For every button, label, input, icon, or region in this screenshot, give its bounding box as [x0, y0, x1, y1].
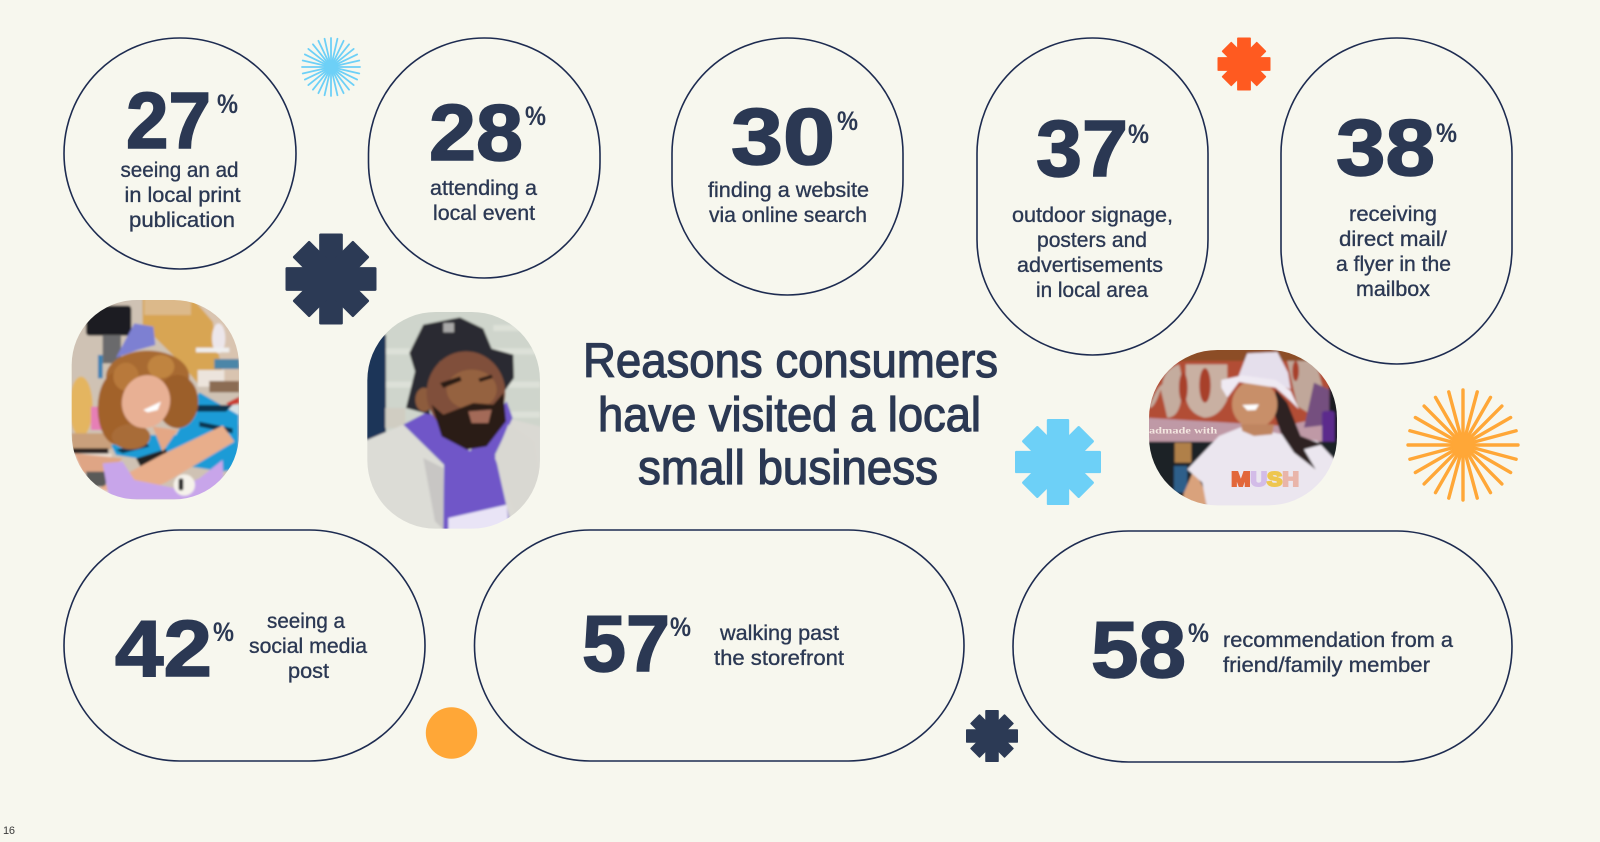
icon: small navy asterisk	[966, 710, 1018, 762]
stat bubble: 27% print ad: seeing an ad	[120, 158, 238, 182]
stat bubble: 38% direct mail: mailbox	[1356, 277, 1430, 301]
photo: man in black bucket hat and purple hoodie	[367, 312, 540, 529]
stat bubble: 38% direct mail: direct mail/	[1339, 227, 1447, 251]
stat bubble: 30% online search: %	[837, 106, 858, 136]
stat bubble: 57% walking past: the storefront	[714, 646, 844, 670]
stat bubble: 37% outdoor signage	[977, 38, 1208, 355]
stat bubble: 37% outdoor signage: %	[1128, 119, 1149, 149]
stat bubble: 42% social media: 42	[115, 604, 212, 693]
icon: orange starburst	[1408, 390, 1518, 500]
stat bubble: 28% local event	[368, 38, 600, 278]
icon: navy asterisk	[286, 234, 376, 324]
stat bubble: 58% recommendation: friend/family member	[1223, 653, 1430, 677]
stat bubble: 38% direct mail	[1281, 38, 1512, 364]
stat bubble: 58% recommendation: %	[1188, 618, 1209, 648]
shirt lettering: MUSH	[1231, 469, 1299, 491]
stat bubble: 30% online search: via online search	[709, 203, 867, 227]
stat bubble: 57% walking past	[474, 530, 964, 761]
stat bubble: 27% print ad: 27	[126, 76, 211, 165]
title: have visited a local	[598, 389, 981, 442]
title: Reasons consumers	[583, 335, 998, 388]
stat bubble: 57% walking past: %	[670, 612, 691, 642]
stat bubble: 38% direct mail: %	[1436, 118, 1457, 148]
stat bubble: 37% outdoor signage: outdoor signage,	[1012, 203, 1173, 227]
stat bubble: 37% outdoor signage: in local area	[1036, 278, 1148, 302]
stat bubble: 30% online search: finding a website	[708, 178, 869, 202]
stat bubble: 57% walking past: 57	[582, 599, 670, 688]
icon: orange circle	[426, 707, 477, 759]
stat bubble: 42% social media: %	[213, 617, 234, 647]
stat bubble: 42% social media: seeing a	[267, 609, 345, 633]
title	[583, 335, 998, 495]
page number: 16	[3, 825, 15, 837]
stat bubble: 28% local event: local event	[433, 201, 535, 225]
stat bubble: 27% print ad: publication	[129, 208, 235, 232]
title: small business	[638, 442, 938, 495]
stat bubble: 58% recommendation: recommendation from a	[1223, 628, 1453, 652]
stat bubble: 27% print ad: in local print	[124, 183, 241, 207]
stat bubble: 28% local event: %	[525, 101, 546, 131]
stat bubble: 27% print ad: %	[217, 89, 238, 119]
photo: woman in white bucket hat and MUSH t-shirt	[1149, 350, 1337, 506]
icon: light blue asterisk	[1015, 419, 1101, 505]
stat bubble: 42% social media: social media	[249, 634, 367, 658]
stat bubble: 28% local event: 28	[429, 88, 523, 177]
stat bubble: 58% recommendation	[1013, 531, 1512, 762]
stat bubble: 58% recommendation: 58	[1091, 605, 1186, 694]
stat bubble: 42% social media: post	[288, 659, 329, 683]
photo banner text: admade with	[1149, 426, 1218, 436]
icon: light blue starburst	[302, 38, 360, 96]
stat bubble: 38% direct mail: receiving	[1349, 202, 1437, 226]
stat bubble: 30% online search	[672, 38, 903, 295]
stat bubble: 38% direct mail: a flyer in the	[1336, 252, 1451, 276]
stat bubble: 28% local event: attending a	[430, 176, 537, 200]
stat bubble: 57% walking past: walking past	[719, 621, 839, 645]
stat bubble: 27% print ad	[64, 38, 296, 269]
stat bubble: 42% social media	[64, 530, 425, 761]
icon: red-orange asterisk	[1218, 38, 1270, 90]
stat bubble: 37% outdoor signage: posters and	[1037, 228, 1147, 252]
stat bubble: 30% online search: 30	[731, 92, 835, 181]
stat bubble: 37% outdoor signage: advertisements	[1017, 253, 1163, 277]
stat bubble: 37% outdoor signage: 37	[1036, 104, 1128, 193]
stat bubble: 38% direct mail: 38	[1336, 103, 1435, 192]
photo: woman with curly hair hugging plush	[72, 300, 239, 500]
